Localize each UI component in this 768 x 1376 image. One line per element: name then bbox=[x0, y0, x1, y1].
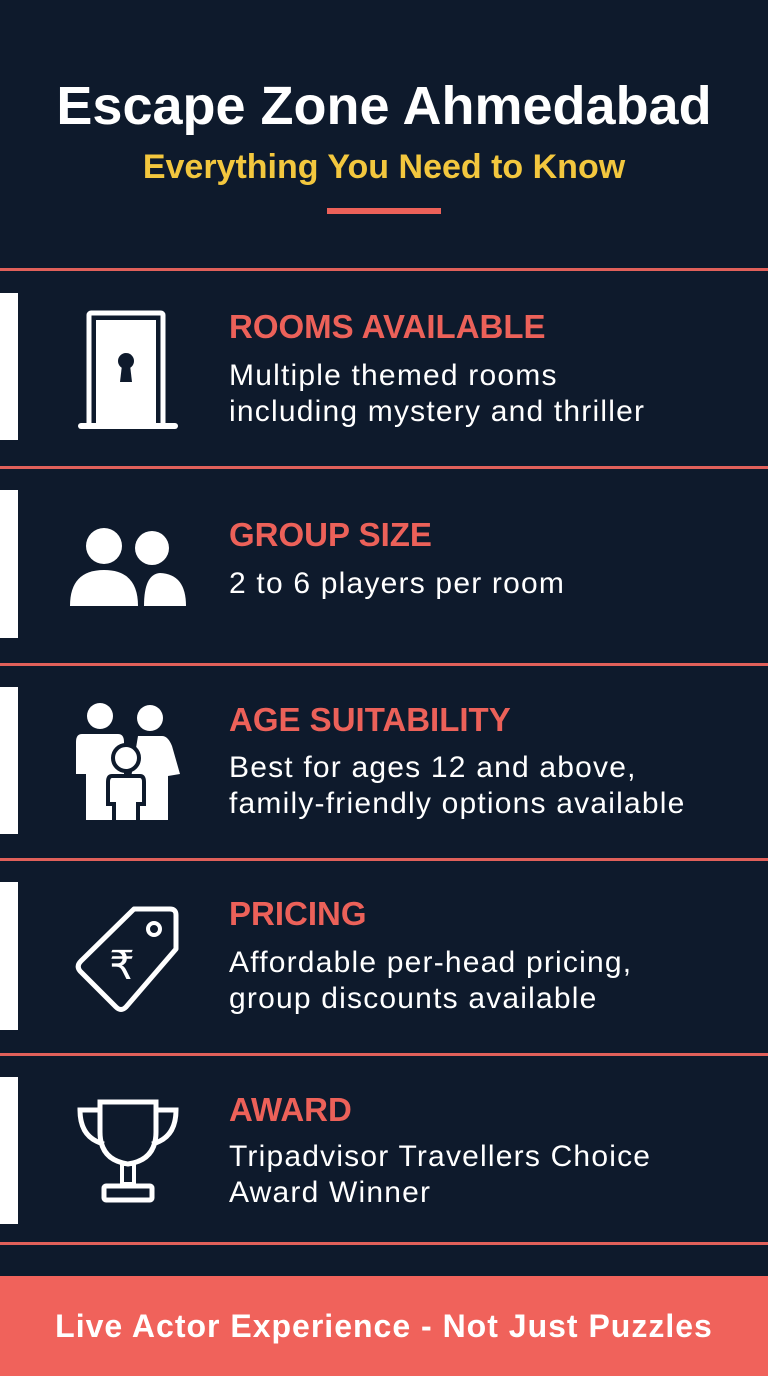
title: Escape Zone Ahmedabad bbox=[56, 76, 712, 136]
text: Affordable per-head pricing, bbox=[229, 946, 632, 979]
heading: AGE SUITABILITY bbox=[229, 701, 511, 738]
text: group discounts available bbox=[229, 982, 598, 1015]
panel: age suitability bbox=[0, 687, 685, 834]
heading: PRICING bbox=[229, 895, 367, 932]
panel: group size bbox=[0, 490, 565, 638]
heading: GROUP SIZE bbox=[229, 516, 432, 553]
heading: AWARD bbox=[229, 1091, 352, 1128]
text: family-friendly options available bbox=[229, 787, 685, 820]
footer banner: Live Actor Experience - Not Just Puzzles bbox=[55, 1308, 713, 1344]
text: 2 to 6 players per room bbox=[229, 567, 565, 600]
panel: rooms available bbox=[0, 293, 645, 440]
text bbox=[229, 751, 685, 820]
icon: family bbox=[76, 703, 180, 820]
heading: ROOMS AVAILABLE bbox=[229, 308, 546, 345]
icon: trophy bbox=[78, 1100, 178, 1202]
footer banner bbox=[0, 1276, 768, 1376]
icon: price tag: ₹ bbox=[109, 943, 135, 989]
subtitle: Everything You Need to Know bbox=[143, 148, 625, 186]
text bbox=[229, 946, 632, 1015]
icon: door bbox=[78, 310, 178, 429]
panel: pricing bbox=[0, 882, 632, 1030]
icon: people bbox=[70, 528, 186, 606]
icon: price tag bbox=[76, 906, 178, 1012]
panel: award bbox=[0, 1077, 651, 1224]
text: Award Winner bbox=[229, 1176, 431, 1209]
text: including mystery and thriller bbox=[229, 395, 645, 428]
text bbox=[229, 359, 645, 428]
text: Multiple themed rooms bbox=[229, 359, 558, 392]
text: Best for ages 12 and above, bbox=[229, 751, 637, 784]
title underline bbox=[327, 208, 441, 214]
text: Tripadvisor Travellers Choice bbox=[229, 1140, 651, 1173]
text bbox=[229, 1140, 651, 1209]
